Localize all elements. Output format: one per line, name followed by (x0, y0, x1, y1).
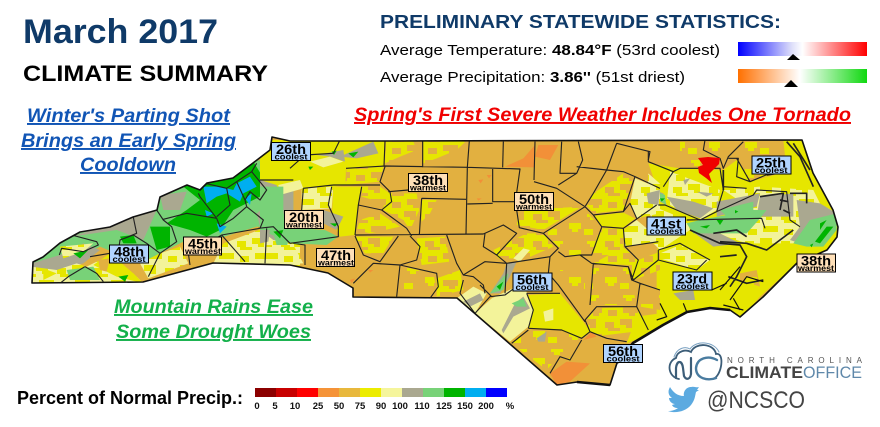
label: 20th warmest (284, 209, 324, 230)
legend: colour scale: 100 (392, 401, 408, 412)
legend: colour scale: 90 (376, 401, 386, 412)
label: 23rd coolest (673, 270, 712, 291)
legend: colour scale: 5 (272, 401, 278, 412)
legend: colour scale: 0 (254, 401, 260, 412)
headline: winter: Cooldown (80, 154, 176, 176)
precipitation gauge (738, 69, 867, 87)
panel: statewide statistics (380, 12, 867, 87)
label: 25th coolest (752, 154, 791, 175)
label: 56th coolest inland: coolest (516, 283, 549, 292)
county lines centre (290, 140, 660, 373)
label: 48th coolest: coolest (112, 255, 146, 264)
label: 25th coolest: coolest (754, 166, 788, 175)
label: 38th warmest (408, 172, 448, 192)
southeast estuaries (657, 267, 763, 320)
legend: colour scale: 25 (313, 401, 324, 412)
logo: NC Climate Office (670, 343, 863, 382)
west (30, 160, 300, 283)
label: 26th coolest (272, 141, 310, 162)
label: 45th warmest (184, 236, 222, 256)
subtitle: CLIMATE SUMMARY (23, 61, 268, 86)
precipitation statistic: Average Precipitation: 3.86'' (51st driest) (380, 69, 685, 86)
headline: mountain rains (114, 296, 313, 343)
label: 56th coolest coast: 56th (608, 343, 638, 359)
centre (260, 140, 660, 385)
legend: colour scale: 50 (334, 401, 344, 412)
map: percent of normal precipitation (31, 136, 839, 386)
label: 25th coolest: 25th (756, 154, 786, 170)
legend: colour scale: 200 (478, 401, 494, 412)
label: 48th coolest (110, 244, 148, 264)
label: 20th warmest: 20th (289, 209, 319, 225)
rank labels (110, 141, 836, 364)
label: 47th warmest (316, 247, 354, 268)
label: 50th warmest (514, 191, 554, 212)
logo text: NORTH CAROLINA (727, 356, 863, 365)
headline: winter (21, 105, 236, 176)
statistics heading: PRELIMINARY STATEWIDE STATISTICS: (380, 12, 781, 32)
label: 38th warmest: 38th (413, 172, 443, 188)
headline: mountain rains: Some Drought Woes (116, 321, 311, 343)
headline: winter: Brings an Early Spring (21, 130, 236, 152)
icon: cloud (670, 343, 721, 379)
label: 56th coolest coast (604, 343, 642, 364)
legend: colour scale (254, 388, 515, 412)
temperature gauge (738, 42, 867, 60)
label: 41st coolest (647, 216, 686, 236)
twitter handle: @NCSCO (707, 387, 805, 414)
legend: colour scale: 75 (355, 401, 366, 412)
title: March 2017 (23, 13, 218, 51)
label: 20th warmest: warmest (285, 220, 322, 230)
label: 48th coolest: 48th (114, 244, 144, 260)
label: 45th warmest: warmest (184, 247, 221, 256)
headline: winter: Winter's Parting Shot (27, 105, 232, 127)
legend: colour scale: % (506, 401, 515, 412)
logo: NC Climate Office: CLIMATE (726, 363, 803, 382)
legend: colour scale: 110 (414, 401, 430, 412)
legend: colour scale: 10 (290, 401, 300, 412)
east (647, 140, 847, 327)
label: 56th coolest inland: 56th (517, 272, 547, 288)
legend title: Percent of Normal Precip.: (17, 388, 243, 408)
state outline (32, 137, 838, 385)
icon: twitter bird (668, 387, 699, 412)
label: 38th warmest coast: warmest (797, 264, 834, 273)
county lines east (648, 140, 813, 287)
label: 56th coolest inland (513, 272, 552, 292)
label: 50th warmest: 50th (519, 191, 549, 207)
headline: mountain rains: Mountain Rains Ease (114, 296, 313, 318)
label: 26th coolest: 26th (276, 141, 306, 157)
label: 26th coolest: coolest (274, 152, 308, 162)
icon: tornado (698, 157, 720, 183)
label: 45th warmest: 45th (188, 236, 218, 252)
legend: colour scale: 150 (457, 401, 473, 412)
label: 47th warmest: warmest (317, 258, 354, 268)
label: 41st coolest: coolest (650, 227, 683, 236)
label: 56th coolest coast: coolest (606, 354, 640, 364)
headline: spring severe weather: Spring's First Severe Weather Includes One Tornado (354, 104, 851, 126)
label: 38th warmest coast: 38th (801, 252, 831, 268)
label: 38th warmest: warmest (409, 184, 446, 192)
logo: NC Climate Office: OFFICE (803, 363, 862, 382)
label: 23rd coolest: 23rd (677, 270, 707, 286)
county lines west (59, 163, 293, 283)
temperature statistic: Average Temperature: 48.84°F (53rd coolest) (380, 42, 720, 59)
legend: colour scale: 125 (436, 401, 453, 412)
label: 23rd coolest: coolest (676, 282, 709, 291)
label: 47th warmest: 47th (321, 247, 351, 263)
label: 50th warmest: warmest (515, 202, 552, 212)
label: 38th warmest coast (797, 252, 836, 273)
label: 41st coolest: 41st (651, 216, 681, 232)
